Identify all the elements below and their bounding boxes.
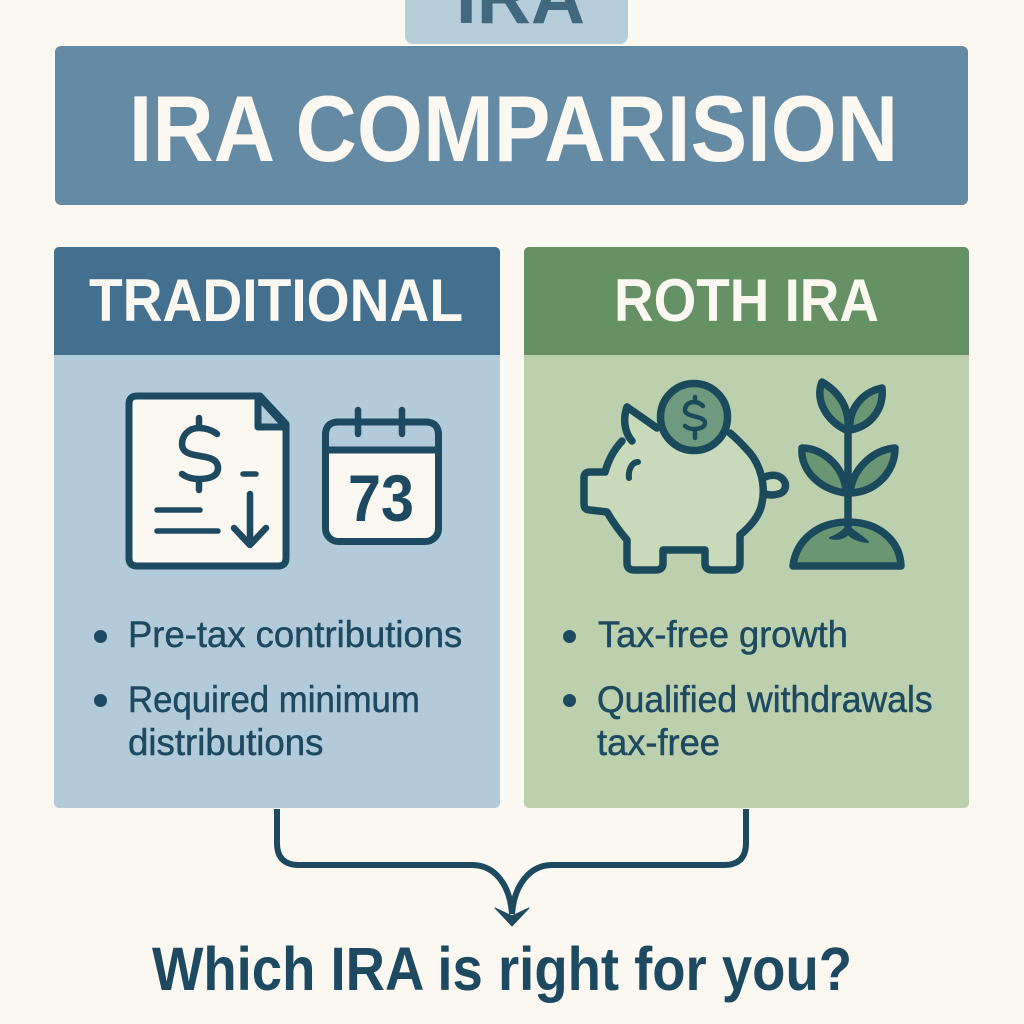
top tab: IRA xyxy=(405,0,628,44)
icon: tax document xyxy=(129,396,286,566)
panel: roth ira xyxy=(524,247,969,808)
title banner xyxy=(55,46,968,205)
heading: traditional xyxy=(54,247,500,355)
bullet list: roth ira: Tax-free growth xyxy=(598,614,848,655)
heading: roth ira xyxy=(524,247,969,355)
title banner: IRA COMPARISION xyxy=(129,76,898,181)
bullet list: traditional: Pre-tax contributions xyxy=(128,614,462,655)
bullet list: traditional xyxy=(94,614,462,763)
bullet list: roth ira: Qualified withdrawals xyxy=(597,679,933,720)
icon: plant sprout xyxy=(793,382,901,566)
panel: traditional xyxy=(54,247,500,808)
icon: piggy bank xyxy=(584,384,786,570)
bullet list: roth ira xyxy=(563,614,933,763)
icon: calendar 73 xyxy=(326,410,438,542)
bullet list: traditional: Required minimum xyxy=(128,679,420,720)
heading: traditional: TRADITIONAL xyxy=(88,267,463,334)
arrow: both options to question xyxy=(277,809,746,926)
bullet list: roth ira: tax-free xyxy=(597,722,720,763)
closing question: Which IRA is right for you? xyxy=(152,934,852,1002)
icon: calendar 73: 73 xyxy=(348,461,414,535)
bullet list: traditional: distributions xyxy=(128,722,323,763)
heading: roth ira: ROTH IRA xyxy=(614,267,879,334)
